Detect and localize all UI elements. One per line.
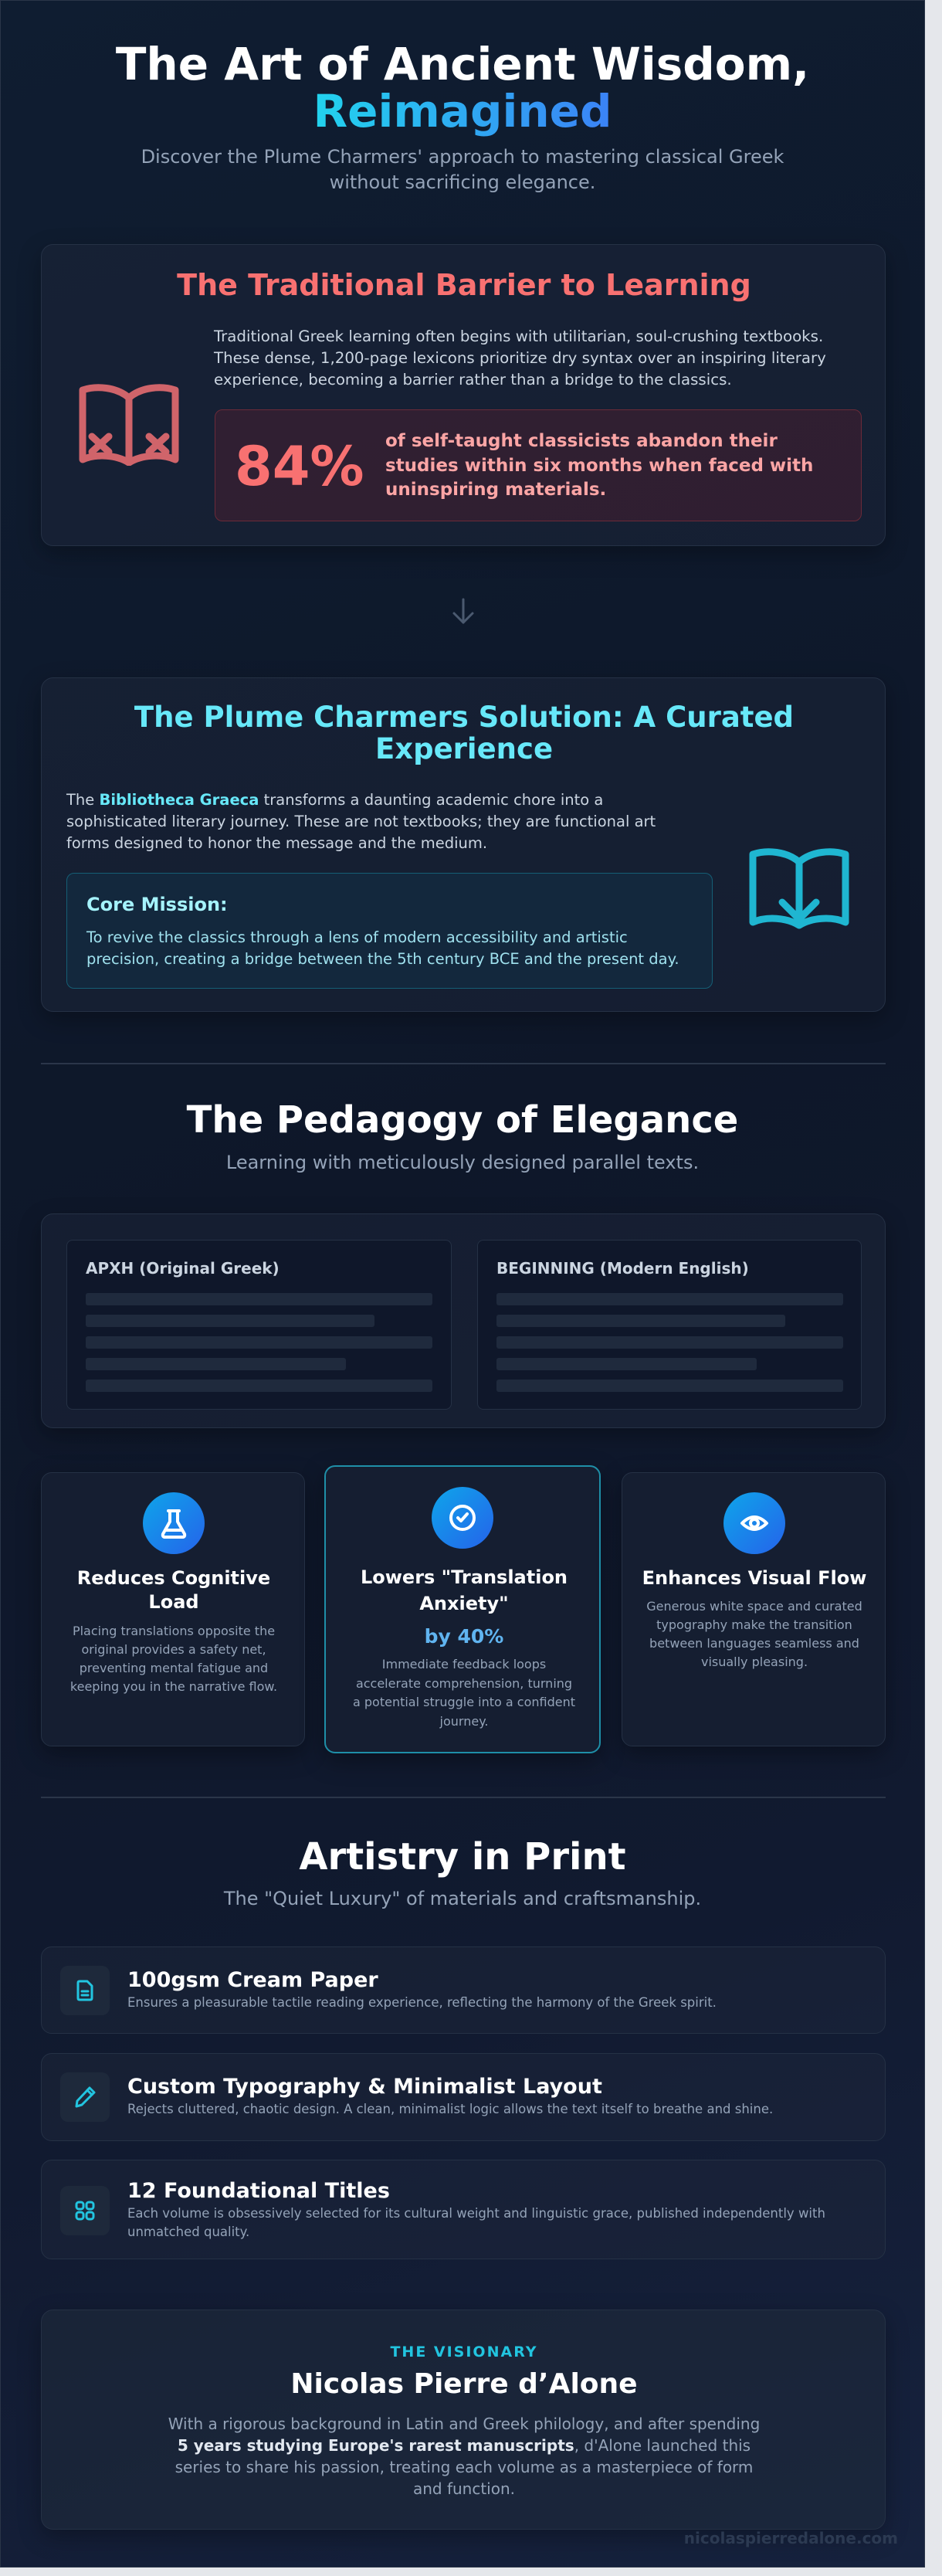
callout: core mission <box>66 873 713 989</box>
row: typography: Custom Typography & Minimalist Layout <box>127 2075 602 2099</box>
title: Reimagined <box>313 85 612 137</box>
arrow: down <box>452 598 474 624</box>
callout: 84% statistic: uninspiring materials. <box>385 480 606 500</box>
label: the visionary: THE VISIONARY <box>390 2344 538 2360</box>
card: lowers translation anxiety: a potential struggle into a confident <box>353 1695 575 1709</box>
divider <box>41 1797 886 1798</box>
column: original greek: APXH (Original Greek) <box>86 1259 280 1278</box>
card: enhances visual flow: between languages seamless and <box>649 1636 859 1651</box>
name: Nicolas Pierre d’Alone <box>290 2368 638 2400</box>
panel: the visionary <box>41 2310 886 2530</box>
panel: parallel texts <box>41 1213 886 1428</box>
callout: core mission: To revive the classics through a lens of modern accessibility and artistic <box>86 928 628 946</box>
card: reduces cognitive load: Load <box>148 1591 199 1613</box>
card: reduces cognitive load: keeping you in the narrative flow. <box>70 1679 277 1694</box>
panel: traditional barrier <box>41 244 886 546</box>
card: enhances visual flow: visually pleasing. <box>701 1655 808 1669</box>
icon: document <box>60 1966 110 2015</box>
card: enhances visual flow: Generous white space and curated <box>646 1599 862 1614</box>
icon: broken book <box>79 384 179 466</box>
footer: url: nicolaspierredalone.com <box>684 2529 898 2547</box>
heading: solution: The Plume Charmers Solution: A Curated <box>134 701 794 734</box>
row: cream paper: 100gsm Cream Paper <box>127 1968 378 1992</box>
heading: artistry: Artistry in Print <box>299 1835 626 1879</box>
subtitle: Discover the Plume Charmers' approach to mastering classical Greek <box>141 146 784 168</box>
subtitle: pedagogy: Learning with meticulously designed parallel texts. <box>226 1152 699 1173</box>
card: lowers translation anxiety <box>324 1465 601 1753</box>
text: biography: With a rigorous background in Latin and Greek philology, and after spending <box>168 2415 760 2433</box>
text: biography: series to share his passion, treating each volume as a masterpiece of form <box>175 2458 753 2476</box>
card: reduces cognitive load: Placing translations opposite the <box>73 1624 275 1638</box>
text: barrier description: Traditional Greek learning often begins with utilitarian, soul-crushing textbooks. <box>214 328 823 345</box>
row: foundational titles: Each volume is obsessively selected for its cultural weight and linguistic grace, published independently with <box>127 2206 825 2221</box>
card: enhances visual flow: Enhances Visual Flow <box>642 1567 866 1589</box>
subtitle <box>141 146 784 193</box>
heading: barrier: The Traditional Barrier to Learning <box>177 268 751 302</box>
text: solution description: sophisticated literary journey. These are not textbooks; they are functional art <box>66 813 656 830</box>
row: typography <box>41 2053 886 2141</box>
card: lowers translation anxiety: accelerate comprehension, turning <box>356 1676 572 1690</box>
subtitle: without sacrificing elegance. <box>330 171 595 193</box>
card: enhances visual flow <box>622 1472 886 1746</box>
icon: pencil <box>60 2072 110 2122</box>
text: biography: and function. <box>413 2479 515 2498</box>
row: foundational titles <box>41 2160 886 2259</box>
icon: grid <box>60 2186 110 2235</box>
column: modern english: BEGINNING (Modern English) <box>496 1259 749 1278</box>
row: foundational titles: 12 Foundational Titles <box>127 2179 390 2203</box>
card: lowers translation anxiety: journey. <box>440 1713 488 1729</box>
heading: solution <box>134 701 794 765</box>
text: solution description <box>66 791 656 852</box>
icon: eye <box>723 1492 785 1554</box>
text: barrier description: These dense, 1,200-page lexicons prioritize dry syntax over an inspiring literary <box>214 349 826 367</box>
panel: solution <box>41 677 886 1012</box>
callout: 84% statistic: studies within six months when faced with <box>385 456 813 476</box>
title <box>116 38 809 137</box>
row: cream paper <box>41 1946 886 2034</box>
stat: by 40%: by 40% <box>425 1625 503 1648</box>
text: barrier description: experience, becoming a barrier rather than a bridge to the classics. <box>214 371 732 389</box>
card: reduces cognitive load: original provides a safety net, <box>81 1642 266 1657</box>
column: original greek <box>66 1240 452 1410</box>
card: reduces cognitive load: Reduces Cognitive <box>77 1567 270 1589</box>
card: enhances visual flow: typography make the transition <box>656 1617 852 1632</box>
card: lowers translation anxiety: Lowers "Translation <box>361 1566 568 1588</box>
divider <box>41 1063 886 1064</box>
text: solution description: forms designed to honor the message and the medium. <box>66 834 487 852</box>
card: reduces cognitive load: preventing mental fatigue and <box>80 1661 268 1675</box>
heading: solution: Experience <box>375 732 553 765</box>
card: lowers translation anxiety: Immediate feedback loops <box>382 1657 546 1672</box>
column: modern english <box>477 1240 862 1410</box>
subtitle: artistry: The "Quiet Luxury" of materials and craftsmanship. <box>224 1888 701 1909</box>
title: The Art of Ancient Wisdom, <box>116 38 809 90</box>
card: lowers translation anxiety: Anxiety" <box>419 1593 509 1614</box>
row: foundational titles: unmatched quality. <box>127 2225 249 2239</box>
callout: 84% statistic <box>215 409 862 521</box>
card: reduces cognitive load <box>41 1472 305 1746</box>
row: cream paper: Ensures a pleasurable tactile reading experience, reflecting the harmony of the Greek spirit. <box>127 1995 717 2010</box>
text: biography <box>168 2415 760 2498</box>
heading: pedagogy: The Pedagogy of Elegance <box>187 1098 738 1142</box>
row: typography: Rejects cluttered, chaotic design. A clean, minimalist logic allows the text itself to breathe and shine. <box>127 2102 773 2116</box>
callout: 84% statistic: 84% <box>235 435 364 498</box>
callout: 84% statistic: of self-taught classicists abandon their <box>385 431 778 451</box>
callout: core mission: precision, creating a bridge between the 5th century BCE and the present day. <box>86 950 679 968</box>
text: solution description: The Bibliotheca Graeca transforms a daunting academic chore into a <box>66 791 603 809</box>
icon: check circle <box>432 1487 493 1549</box>
text: biography: 5 years studying Europe's rarest manuscripts, d'Alone launched this <box>178 2436 751 2455</box>
text: barrier description <box>213 328 826 389</box>
icon: book with arrow <box>749 848 849 928</box>
icon: flask <box>143 1492 205 1554</box>
callout: core mission: Core Mission: <box>86 894 228 915</box>
